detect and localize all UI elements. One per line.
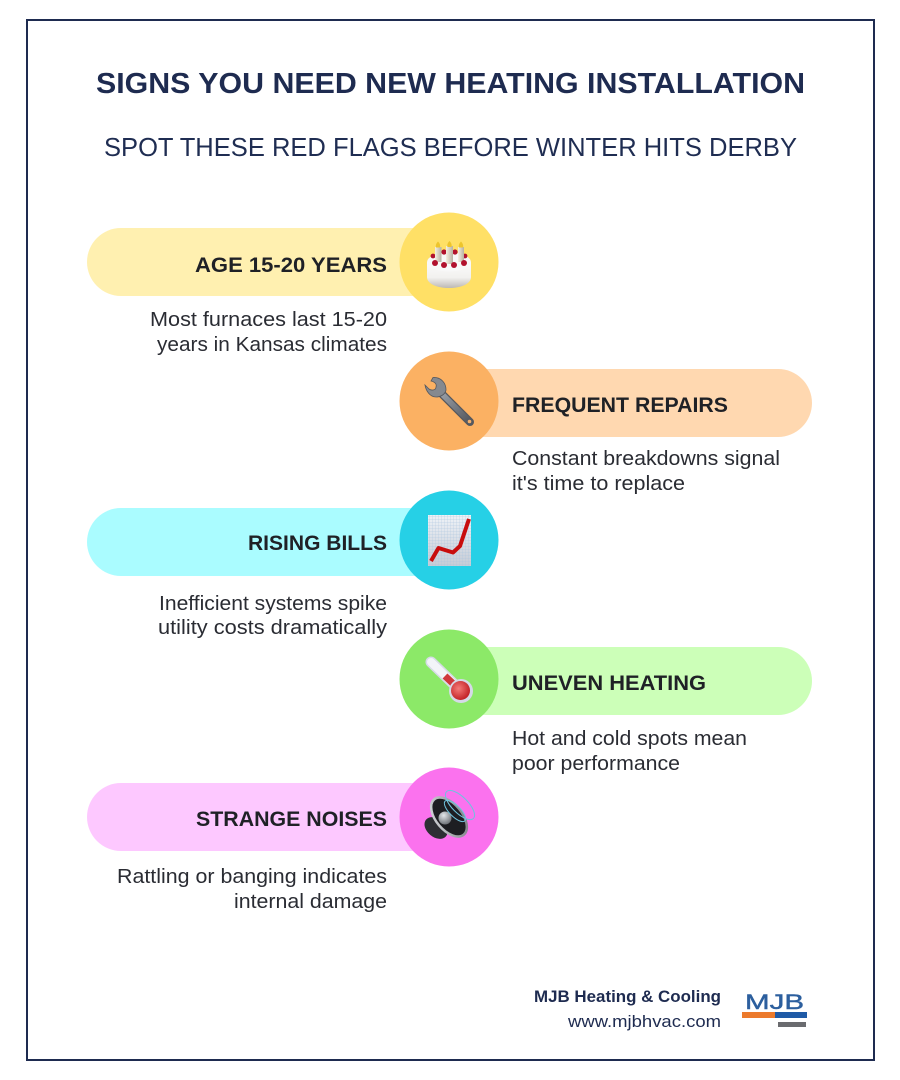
- pill: uneven heating: [452, 647, 812, 715]
- description: bills: [158, 593, 387, 639]
- heading: noises: STRANGE NOISES: [196, 808, 387, 831]
- heading: bills: RISING BILLS: [248, 532, 387, 555]
- icon: birthday cake: [427, 241, 471, 288]
- description: noises: internal damage: [234, 891, 387, 913]
- sign 2: repairs: [400, 352, 812, 495]
- icon: thermometer: [431, 662, 473, 703]
- description: repairs: [512, 448, 780, 495]
- heading: uneven heating: UNEVEN HEATING: [512, 672, 706, 695]
- icon circle: noises: [400, 768, 498, 866]
- icon circle: repairs: [400, 352, 498, 450]
- description: uneven heating: [512, 728, 747, 775]
- logo: MJB: [742, 991, 807, 1027]
- description: noises: [117, 866, 387, 913]
- sign 1: age: [87, 212, 498, 356]
- footer: company name: MJB Heating & Cooling: [534, 988, 721, 1006]
- description: uneven heating: Hot and cold spots mean: [512, 728, 747, 750]
- title: SIGNS YOU NEED NEW HEATING INSTALLATION: [96, 68, 805, 100]
- sign 3: bills: [87, 490, 498, 639]
- description: uneven heating: poor performance: [512, 753, 680, 775]
- sign 4: uneven heating: [400, 630, 812, 775]
- icon circle: age: [400, 212, 498, 312]
- description: age: Most furnaces last 15-20: [150, 309, 387, 331]
- footer: website: www.mjbhvac.com: [567, 1013, 721, 1031]
- pill: noises: [87, 783, 447, 851]
- icon circle: bills: [400, 490, 498, 590]
- icon: wrench: [425, 377, 471, 423]
- description: bills: Inefficient systems spike: [159, 593, 387, 615]
- description: noises: Rattling or banging indicates: [117, 866, 387, 888]
- sign 5: noises: [87, 768, 498, 913]
- pill: age: [87, 228, 447, 296]
- icon circle: uneven heating: [400, 630, 498, 728]
- icon: speaker: [420, 786, 479, 843]
- description: bills: utility costs dramatically: [158, 617, 387, 639]
- icon: rising chart: [428, 515, 471, 566]
- logo: MJB: MJB: [745, 991, 804, 1014]
- subtitle: SPOT THESE RED FLAGS BEFORE WINTER HITS DERBY: [104, 132, 797, 162]
- description: age: years in Kansas climates: [157, 334, 387, 356]
- description: repairs: it's time to replace: [512, 473, 685, 495]
- heading: repairs: FREQUENT REPAIRS: [512, 394, 728, 417]
- description: repairs: Constant breakdowns signal: [512, 448, 780, 470]
- pill: bills: [87, 508, 447, 576]
- description: age: [150, 309, 387, 356]
- pill: repairs: [452, 369, 812, 437]
- heading: age: AGE 15-20 YEARS: [195, 254, 387, 277]
